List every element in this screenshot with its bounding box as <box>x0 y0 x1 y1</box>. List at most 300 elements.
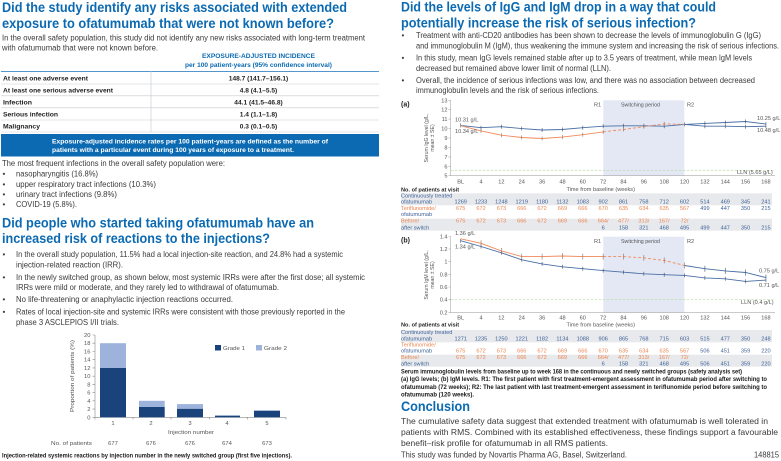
legend <box>215 345 287 352</box>
line chart (a): IgG levels: 7 <box>444 155 448 161</box>
caption: immunoglobulin charts: (a) IgG levels; (b) IgM levels. R1: The first patient with first treatment-emergent assessment in ofatumumab period after switching to <box>401 376 767 383</box>
conclusion text block: patients with RMS. Combined with its established effectiveness, these findings support a favourable <box>401 427 778 437</box>
continuous group line <box>461 239 766 283</box>
bars: grade 2 <box>100 343 280 416</box>
y axis: 14 <box>84 358 91 364</box>
list: injection reaction findings <box>2 250 365 327</box>
table: patients at visit (a): 72/ <box>681 218 689 224</box>
patient counts: 676 <box>185 441 195 447</box>
table: patients at visit (b): 666 <box>578 355 587 361</box>
table: patients at visit (a): 447 <box>721 226 730 232</box>
y axis <box>70 333 95 421</box>
bars: grade 1 <box>100 368 280 417</box>
line chart (b): IgM levels: 12 <box>498 315 505 321</box>
table: patients at visit (b): 603 <box>680 336 689 342</box>
table: patients at visit (b): 669 <box>558 349 567 355</box>
heading: injection reactions <box>2 216 314 247</box>
table: patients at visit (a): 634 <box>639 206 649 212</box>
list: immunoglobulin findings: • <box>402 54 404 63</box>
table: patients at visit (b): 673 <box>497 349 506 355</box>
table: patients at visit (a): 1083 <box>577 200 589 206</box>
table: patients at visit (b): 1271 <box>454 336 467 342</box>
table: patients at visit (b): 768 <box>639 336 649 342</box>
table: patients at visit (b): 670 <box>598 349 608 355</box>
table: patients at visit (b): 477 <box>721 336 730 342</box>
y axis: 2 <box>87 407 90 413</box>
table: patients at visit (b): 567 <box>680 349 689 355</box>
table: patients at visit (b): 906 <box>598 336 608 342</box>
table: patients at visit (a): 669 <box>558 206 567 212</box>
table: patients at visit (a): 215 <box>761 226 771 232</box>
table: patients at visit (b): 451 <box>721 349 730 355</box>
switched group line <box>461 122 685 140</box>
patient counts: 677 <box>108 441 118 447</box>
line chart (a): IgG levels: 24 <box>519 180 525 186</box>
caption: immunoglobulin charts: ofatumumab (120 weeks). <box>401 392 474 399</box>
x axis <box>95 417 286 436</box>
line chart (a): IgG levels: 4 <box>479 180 483 186</box>
table: patients at visit (a): 567 <box>680 206 689 212</box>
table: patients at visit (a): 672 <box>537 218 547 224</box>
table: patients at visit (a): 669 <box>558 218 567 224</box>
funding note and code: 148815 <box>754 450 780 459</box>
table: patients at visit (a): ofatumumab <box>401 212 432 218</box>
table: patients at visit (b): 635 <box>660 349 669 355</box>
line chart (a): IgG levels: (a) <box>401 102 410 109</box>
table: patients at visit (b): 666 <box>578 349 587 355</box>
table: patients at visit (a): 758 <box>639 200 649 206</box>
line chart (b): IgM levels: R2 <box>687 239 694 245</box>
table: patients at visit (a): 1219 <box>516 200 528 206</box>
conclusion text block <box>401 416 778 448</box>
line chart (b): IgM levels: 132 <box>700 315 710 321</box>
line chart (a): IgG levels: 6 <box>444 164 448 170</box>
table: patients at visit (b): 515 <box>700 336 710 342</box>
line chart (a): IgG levels: 96 <box>641 180 647 186</box>
table: patients at visit (a): 514 <box>700 200 710 206</box>
table: patients at visit (b): 220 <box>761 349 771 355</box>
heading: extended exposure risks <box>2 0 347 32</box>
line chart (b): IgM levels: 84 <box>620 315 627 321</box>
list: injection reaction findings: • <box>2 295 6 304</box>
list: immunoglobulin findings: immunoglobulin levels and the risk of serious infections. <box>416 86 599 95</box>
line chart (a): IgG levels: BL <box>457 180 464 186</box>
line chart (b): IgM levels: Serum IgM level (g/L, <box>424 250 430 300</box>
table: patients at visit (a): 345 <box>741 200 750 206</box>
line chart (b): IgM levels: 1.2 <box>440 247 448 253</box>
conclusion text block: benefit–risk profile for ofatumumab in all RMS patients. <box>401 438 608 448</box>
intro text block: with ofatumumab that were not known before. <box>1 44 158 52</box>
table: patients at visit (b): 634 <box>639 349 649 355</box>
table: patients at visit (a): 6 <box>602 226 605 232</box>
list: injection reaction findings: IRRs were mild or moderate, and they rarely led to withdrawal of ofatumumab. <box>16 283 279 292</box>
line chart (b): IgM levels: 120 <box>680 315 689 321</box>
table: patients at visit (a): 861 <box>619 200 628 206</box>
table: patients at visit (b): Teriflunomide/ <box>401 342 436 348</box>
caption: bar chart: Injection-related systemic reactions by injection number in the newly switched group (first five injections). <box>2 452 292 460</box>
line chart (b): IgM levels: 0.8 <box>440 272 448 278</box>
table: exposure-adjusted incidence: 4.8 (4.1–5.5) <box>240 88 277 94</box>
line chart (b): IgM levels: 1.36 g/L <box>455 231 475 237</box>
line chart (b): IgM levels <box>401 231 779 329</box>
table: patients at visit (a): 469 <box>721 200 730 206</box>
table: patients at visit (b): ofatumumab <box>401 336 432 342</box>
table: patients at visit (a): 666 <box>517 206 526 212</box>
table: patients at visit (b) <box>401 323 772 367</box>
table: patients at visit (b): 664/ <box>598 355 609 361</box>
line chart (b): IgM levels: 1.34 g/L <box>455 245 475 251</box>
table: patients at visit (b): Continuously treated <box>401 330 452 336</box>
patient counts <box>51 441 272 447</box>
table: patients at visit (a): 672 <box>476 206 486 212</box>
x axis: 2 <box>149 421 153 427</box>
list: immunoglobulin findings <box>402 31 779 95</box>
table: patients at visit (a): Teriflunomide/ <box>401 206 436 212</box>
patient counts: 674 <box>222 441 233 447</box>
table: patients at visit (a): 902 <box>598 200 608 206</box>
line chart (b): IgM levels: Switching period <box>621 239 660 245</box>
list: injection reaction findings: Rates of local injection-site and systemic IRRs were consistent with those previously reported in the <box>16 308 346 316</box>
conclusion text block: The cumulative safety data suggest that extended treatment with ofatumumab is well tolerated in <box>401 416 768 426</box>
list: most frequent infections: nasopharyngitis (16.8%) <box>16 170 98 179</box>
table: patients at visit (a): 664/ <box>598 218 609 224</box>
list: most frequent infections: • <box>2 190 6 199</box>
table: patients at visit (b): 669 <box>558 355 567 361</box>
list: most frequent infections <box>2 159 225 209</box>
table: exposure-adjusted incidence: At least one serious adverse event <box>3 88 114 94</box>
y axis: 18 <box>84 341 90 347</box>
list: most frequent infections: The most frequent infections in the overall safety population were: <box>2 159 225 168</box>
table: patients at visit (a): Before/ <box>401 218 419 224</box>
table: patients at visit (b): 72/ <box>681 355 689 361</box>
table: patients at visit (b): 673 <box>497 355 506 361</box>
table: patients at visit (b): 666 <box>517 355 526 361</box>
line chart (b): IgM levels: 0.75 g/L <box>759 269 779 275</box>
heading: injection reactions: Did people who started taking ofatumumab have an <box>2 216 314 232</box>
table: patients at visit (b): 359 <box>741 349 750 355</box>
table: patients at visit (b): 220 <box>761 361 771 367</box>
line chart (a): IgG levels: 72 <box>600 180 606 186</box>
table: patients at visit (b): 672 <box>476 349 486 355</box>
line chart (a): IgG levels: Time from baseline (weeks) <box>566 187 635 193</box>
x axis: 5 <box>265 421 269 427</box>
heading: injection reactions: increased risk of reactions to the injections? <box>2 231 270 247</box>
line chart (b): IgM levels: 48 <box>559 315 566 321</box>
table: exposure-adjusted incidence: EXPOSURE-ADJUSTED INCIDENCE <box>202 53 316 60</box>
table: patients at visit (b): Before/ <box>401 355 419 361</box>
table: patients at visit (a): 602 <box>680 200 689 206</box>
table: patients at visit (a): 447 <box>721 206 730 212</box>
table: patients at visit (a): 477/ <box>618 218 629 224</box>
table: exposure-adjusted incidence: 0.3 (0.1–0.5) <box>240 124 277 131</box>
funding note and code: This study was funded by Novartis Pharma AG, Basel, Switzerland. <box>401 450 627 459</box>
line chart (a): IgG levels: R2 <box>687 103 694 109</box>
table: patients at visit (b): 1088 <box>577 336 589 342</box>
table: patients at visit (b): 635 <box>619 349 628 355</box>
funding note and code <box>401 450 780 459</box>
line chart (b): IgM levels: R1 <box>594 239 601 245</box>
line chart (b): IgM levels: 144 <box>721 315 730 321</box>
y axis: 0 <box>87 415 90 421</box>
table: patients at visit (a): 468 <box>660 226 669 232</box>
line chart (a): IgG levels: 10.25 g/L <box>757 116 780 122</box>
line chart (a): IgG levels: 10.34 g/L <box>455 129 478 135</box>
heading: conclusion: Conclusion <box>401 399 470 415</box>
table: exposure-adjusted incidence: Malignancy <box>3 124 40 131</box>
line chart (a): IgG levels: 5 <box>444 174 448 180</box>
table: patients at visit (a): 1233 <box>475 200 487 206</box>
line chart (a): IgG levels: 8 <box>444 145 448 151</box>
patient counts: 673 <box>262 441 272 447</box>
line chart (b): IgM levels: LLN (0.4 g/L) <box>741 300 774 306</box>
table: patients at visit (b): 248 <box>761 336 771 342</box>
y axis: Proportion of patients (%) <box>70 340 76 412</box>
line chart (a): IgG levels: 48 <box>559 180 566 186</box>
table: patients at visit (a): 495 <box>680 226 689 232</box>
line chart (a): IgG levels: 120 <box>680 180 689 186</box>
line chart (a): IgG levels: R1 <box>594 103 601 109</box>
table: patients at visit (b): 321 <box>639 361 649 367</box>
legend: Grade 2 <box>264 346 287 352</box>
list: most frequent infections: COVID-19 (5.8%). <box>16 200 77 209</box>
table: patients at visit (a): 635 <box>660 206 669 212</box>
list: injection reaction findings: • <box>2 250 6 259</box>
table: patients at visit (a): 241 <box>761 200 771 206</box>
intro text block <box>1 34 366 52</box>
line chart (b): IgM levels: 72 <box>600 315 606 321</box>
list: injection reaction findings: • <box>2 273 6 282</box>
line chart (b): IgM levels: 24 <box>519 315 525 321</box>
line chart (b): IgM levels: 0.71 g/L <box>759 283 779 289</box>
table: exposure-adjusted incidence: 148.7 (141.7–156.1) <box>229 76 288 82</box>
table: patients at visit (b): 1182 <box>536 336 548 342</box>
line chart (b): IgM levels: BL <box>457 315 464 321</box>
line chart (a): IgG levels: LLN (5.65 g/L) <box>737 170 773 176</box>
table: patients at visit (b): 350 <box>741 336 750 342</box>
caption: immunoglobulin charts <box>401 368 767 399</box>
line chart (a): IgG levels: 168 <box>761 180 771 186</box>
heading: extended exposure risks: Did the study identify any risks associated with extended <box>2 0 347 16</box>
table: patients at visit (b): 1250 <box>495 336 508 342</box>
table: patients at visit (b): 1221 <box>516 336 528 342</box>
line chart (b): IgM levels: mean ± SE) <box>430 261 436 289</box>
line chart (b): IgM levels: 156 <box>741 315 750 321</box>
list: most frequent infections: upper respiratory tract infections (10.3%) <box>16 180 156 189</box>
line chart (a): IgG levels: 144 <box>721 180 730 186</box>
line chart (b): IgM levels: 4 <box>479 315 483 321</box>
continuous group line <box>461 120 766 132</box>
line chart (b): IgM levels: 1 <box>444 260 448 266</box>
x axis: 4 <box>225 421 229 427</box>
x axis: 3 <box>188 421 192 427</box>
line chart (a): IgG levels: 10.31 g/L <box>455 118 478 124</box>
table: exposure-adjusted incidence: Infection <box>3 100 32 106</box>
table: patients at visit (b): after switch <box>401 361 429 367</box>
x axis: 1 <box>111 421 115 427</box>
table: patients at visit (a) <box>401 188 772 232</box>
heading: IgG and IgM levels <box>401 0 716 32</box>
table: patients at visit (a): 1248 <box>495 200 508 206</box>
line chart (b): IgM levels: 36 <box>539 315 545 321</box>
y axis: 20 <box>84 333 90 339</box>
table: patients at visit (a): 672 <box>537 206 547 212</box>
list: most frequent infections: • <box>2 180 6 189</box>
patient counts: No. of patients <box>51 441 92 447</box>
table: patients at visit (a): 712 <box>660 200 669 206</box>
table: patients at visit (b): 6 <box>602 361 605 367</box>
table: patients at visit (b): 672 <box>537 355 547 361</box>
table: patients at visit (b): 672 <box>476 355 486 361</box>
table: patients at visit (a): 499 <box>700 206 710 212</box>
y axis: 16 <box>84 350 90 356</box>
line chart (a): IgG levels: 12 <box>498 180 505 186</box>
table: patients at visit (b): 675 <box>456 355 465 361</box>
caption: immunoglobulin charts: Serum immunoglobulin levels from baseline up to week 168 in the continuous and newly switched groups (safety analysis set) <box>401 368 742 375</box>
table: patients at visit (a): after switch <box>401 226 429 232</box>
table: patients at visit (a): 675 <box>456 218 465 224</box>
table: patients at visit (a): 1269 <box>454 200 467 206</box>
table: patients at visit (a): 666 <box>517 218 526 224</box>
line chart (a): IgG levels: Switching period <box>621 103 660 109</box>
x axis: Injection number <box>168 430 214 436</box>
y axis: 4 <box>87 399 91 405</box>
list: most frequent infections: urinary tract infections (9.8%) <box>16 190 117 199</box>
table: patients at visit (b): 167/ <box>659 355 670 361</box>
line chart (a): IgG levels: 36 <box>539 180 545 186</box>
table: patients at visit (a): ofatumumab <box>401 200 432 206</box>
caption: immunoglobulin charts: ofatumumab (72 weeks); R2: The last patient with last treatment-emergent assessment in teriflunomide period before switching to <box>401 384 767 391</box>
intro text block: In the overall safety population, this study did not identify any new risks associated with long-term treatment <box>2 34 366 42</box>
line chart (b): IgM levels: 168 <box>761 315 771 321</box>
table: patients at visit (a): 670 <box>598 206 608 212</box>
table: exposure-adjusted incidence: At least one adverse event <box>3 76 89 82</box>
list: immunoglobulin findings: In this study, mean IgG levels remained stable after up to 3.5 years of treatment, while mean IgM levels <box>416 54 752 63</box>
line chart (b): IgM levels: 0.4 <box>440 298 448 304</box>
table: exposure-adjusted incidence: Serious infection <box>3 112 58 118</box>
table: patients at visit (a): 673 <box>497 206 506 212</box>
y axis: 10 <box>84 374 90 380</box>
table: patients at visit (b): 506 <box>700 361 710 367</box>
list: immunoglobulin findings: Treatment with anti-CD20 antibodies has been shown to decrease the levels of immunoglobulin G (IgG) <box>416 31 761 40</box>
line chart (a): IgG levels <box>401 98 780 193</box>
table: patients at visit (a): 1132 <box>556 200 568 206</box>
heading: extended exposure risks: exposure to ofatumumab that were not known before? <box>2 16 334 32</box>
line chart (b): IgM levels: 60 <box>580 315 586 321</box>
list: injection reaction findings: In the overall study population, 11.5% had a local injection-site reaction, and 24.8% had a systemic <box>16 250 343 259</box>
line chart (b): IgM levels: 96 <box>641 315 647 321</box>
list: injection reaction findings: In the newly switched group, as shown below, most systemic IRRs were after the first dose; all systemic <box>16 273 365 282</box>
table: patients at visit (b): 313/ <box>638 355 650 361</box>
table: patients at visit (a): 666 <box>578 218 587 224</box>
line chart (a): IgG levels: Serum IgG level (g/L, <box>424 113 430 163</box>
list: immunoglobulin findings: • <box>402 76 404 85</box>
line chart (b): IgM levels: (b) <box>401 238 410 245</box>
table: patients at visit (a): Continuously treated <box>401 193 452 199</box>
line chart (a): IgG levels: 10 <box>441 127 448 133</box>
table: patients at visit (a): 672 <box>476 218 486 224</box>
table: patients at visit (a): 350 <box>741 226 750 232</box>
line chart (b): IgM levels: Time from baseline (weeks) <box>566 323 635 329</box>
list: immunoglobulin findings: • <box>402 31 404 40</box>
table: patients at visit (b): 495 <box>680 361 689 367</box>
table: patients at visit (b): ofatumumab <box>401 349 432 355</box>
table: exposure-adjusted incidence: 1.4 (1.1–1.8) <box>240 112 277 118</box>
table: patients at visit (a): 675 <box>456 206 465 212</box>
line chart (b): IgM levels: 0.6 <box>440 285 448 291</box>
callout: definition of incidence rate: patients with a particular event during 100 years of exposure to a treatment. <box>52 147 294 154</box>
list: immunoglobulin findings: decreased but remained above lower limit of normal (LLN). <box>416 64 611 73</box>
line chart (a): IgG levels: 12 <box>441 108 448 114</box>
line chart (a): IgG levels: 11 <box>442 117 448 123</box>
list: injection reaction findings: injection-related reaction (IRR). <box>16 260 123 270</box>
table: patients at visit (b): 715 <box>660 336 669 342</box>
patient counts: 676 <box>146 441 156 447</box>
line chart (b): IgM levels: 108 <box>660 315 669 321</box>
list: injection reaction findings: phase 3 ASCLEPIOS I/II trials. <box>16 318 119 327</box>
table: patients at visit (b): 1134 <box>556 336 568 342</box>
table: patients at visit (a): 215 <box>761 206 771 212</box>
line chart (b): IgM levels: 0.2 <box>440 311 448 317</box>
line chart (b): IgM levels: 1.4 <box>440 234 448 240</box>
table: patients at visit (b): 451 <box>721 361 730 367</box>
table: patients at visit (a): No. of patients at visit <box>401 188 459 194</box>
table: exposure-adjusted incidence <box>1 53 379 132</box>
list: immunoglobulin findings: Overall, the incidence of serious infections was low, and there was no association between decreased <box>416 76 755 85</box>
y axis: 12 <box>84 366 90 372</box>
table: patients at visit (b): 506 <box>700 349 710 355</box>
line chart (a): IgG levels: 108 <box>660 180 669 186</box>
table: patients at visit (a): 499 <box>700 226 710 232</box>
line chart (a): IgG levels: 84 <box>620 180 627 186</box>
line chart (a): IgG levels: 10.48 g/L <box>757 128 780 134</box>
table: patients at visit (a): 635 <box>619 206 628 212</box>
table: patients at visit (b): 359 <box>741 361 750 367</box>
table: patients at visit (a): 666 <box>578 206 587 212</box>
y axis: 8 <box>87 382 90 388</box>
table: patients at visit (a): 1180 <box>536 200 548 206</box>
line chart (a): IgG levels: 60 <box>580 180 586 186</box>
table: patients at visit (b): 1235 <box>475 336 487 342</box>
table: patients at visit (a): 350 <box>741 206 750 212</box>
heading: IgG and IgM levels: potentially increase the risk of serious infection? <box>401 16 696 32</box>
line chart (a): IgG levels: 13 <box>441 98 448 104</box>
list: injection reaction findings: • <box>2 308 6 316</box>
line chart (a): IgG levels: 9 <box>444 136 448 142</box>
table: exposure-adjusted incidence: per 100 patient-years (95% confidence interval) <box>185 62 332 69</box>
switched group line <box>461 239 685 268</box>
legend: Grade 1 <box>223 346 245 352</box>
table: patients at visit (b): No. of patients at visit <box>401 323 459 329</box>
table: exposure-adjusted incidence: 44.1 (41.5–46.8) <box>234 100 283 106</box>
table: patients at visit (b): 468 <box>660 361 669 367</box>
line chart (a): IgG levels: 132 <box>700 180 710 186</box>
table: patients at visit (b): 675 <box>456 349 465 355</box>
bar chart: systemic reactions by injection number <box>51 333 287 447</box>
table: patients at visit (a): 321 <box>639 226 649 232</box>
table: patients at visit (a): 313/ <box>638 218 650 224</box>
table: patients at visit (a): 673 <box>497 218 506 224</box>
list: most frequent infections: • <box>2 200 6 209</box>
table: patients at visit (a): 167/ <box>659 218 670 224</box>
callout: definition of incidence rate: Exposure-adjusted incidence rates per 100 patient-years are defined as the number of <box>52 138 329 145</box>
table: patients at visit (b): 477/ <box>618 355 629 361</box>
table: patients at visit (b): 666 <box>517 349 526 355</box>
line chart (a): IgG levels: mean ± SE) <box>430 124 436 152</box>
line chart (a): IgG levels: 156 <box>741 180 750 186</box>
table: patients at visit (b): 672 <box>537 349 547 355</box>
table: patients at visit (a): 158 <box>619 226 628 232</box>
table: patients at visit (b): 158 <box>619 361 628 367</box>
